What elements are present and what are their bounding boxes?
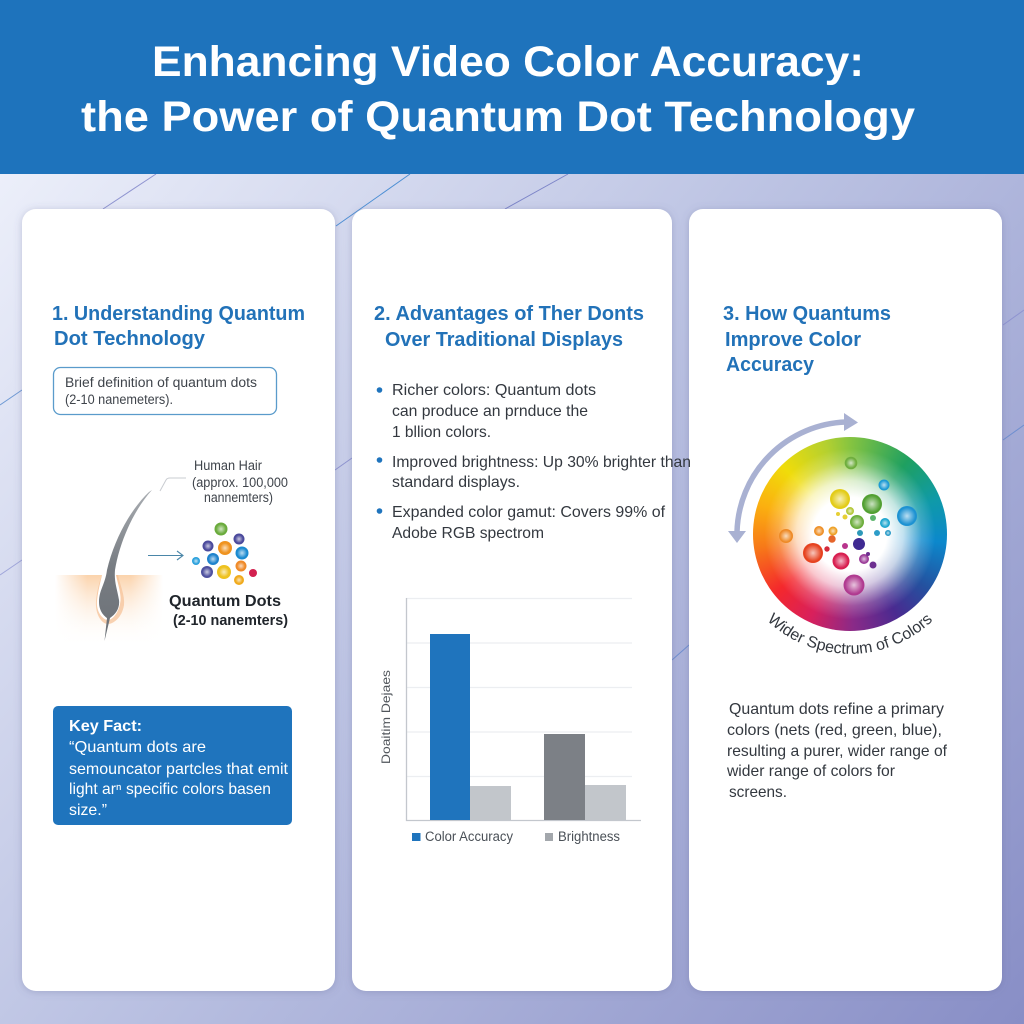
callout: key fact: “Quantum dots are [69,739,206,756]
heading: panel 3: 3. How Quantums [723,303,891,325]
description text [726,701,948,801]
wheel caption: Wider Spectrum of Colors [769,612,932,654]
bullet: richer colors: can produce an prnduce the [392,403,588,420]
title [81,38,915,141]
title: the Power of Quantum Dot Technology [81,93,915,141]
chart legend: Brightness [558,829,620,844]
label: human hair: Human Hair [194,458,262,473]
definition box: (2-10 nanemeters). [65,392,173,407]
definition box [54,368,276,414]
title: Enhancing Video Color Accuracy: [152,38,864,86]
callout: key fact: size.” [69,802,107,819]
bullet: expanded color gamut [377,504,666,542]
quantum dot bubbles [779,457,917,596]
heading: panel 2: Over Traditional Displays [385,329,623,351]
label: quantum dots [169,593,288,629]
chart legend [412,829,620,844]
header banner [0,0,1024,174]
illustration: human hair in skin [55,478,186,647]
bar chart: Doaitim Dejaes [379,670,393,764]
callout: key fact: light arⁿ specific colors basen [69,781,271,798]
heading: panel 1: 1. Understanding Quantum [52,303,305,325]
label: quantum dots: Quantum Dots [169,593,281,610]
heading: panel 1 [52,303,305,350]
arrow: hair to dots [148,551,183,560]
callout: key fact: Key Fact: [69,718,142,735]
color wheel [752,436,948,632]
bar chart [379,598,641,844]
heading: panel 2 [374,303,644,351]
panel: advantages over traditional displays [352,209,691,991]
definition box: Brief definition of quantum dots [65,375,257,390]
bullet: improved brightness [377,454,691,491]
bullet: expanded color gamut: Adobe RGB spectrom [392,525,544,542]
chart legend: Color Accuracy [425,829,513,844]
arrow: curved double arrow [728,413,858,543]
bullet: richer colors [377,382,596,441]
heading: panel 3 [723,303,891,376]
description text: screens. [729,784,787,801]
description text: wider range of colors for [726,763,895,780]
panel: how quantum dots improve color accuracy [686,208,1004,993]
callout: key fact: semouncator partcles that emit [69,761,289,778]
label: human hair: nannemters) [204,490,273,505]
description text: colors (nets (red, green, blue), [727,722,942,739]
callout: key fact [53,706,292,825]
heading: panel 1: Dot Technology [54,328,206,350]
bullet: richer colors: 1 bllion colors. [392,424,491,441]
bullet: richer colors: Richer colors: Quantum dots [392,382,596,399]
bullet: expanded color gamut: Expanded color gamut: Covers 99% of [392,504,666,521]
description text: Quantum dots refine a primary [729,701,944,718]
description text: resulting a purer, wider range of [727,743,948,760]
label: quantum dots: (2-10 nanemters) [173,612,288,629]
bullet: improved brightness: standard displays. [392,474,520,491]
icon: quantum dots cluster [192,522,257,585]
heading: panel 3: Improve Color [725,329,861,351]
heading: panel 3: Accuracy [726,354,815,376]
heading: panel 2: 2. Advantages of Ther Donts [374,303,644,325]
panel: understanding quantum dot technology [22,209,335,991]
label: human hair: (approx. 100,000 [192,475,288,490]
bullet: improved brightness: Improved brightness: Up 30% brighter than [392,454,691,471]
label: human hair [192,458,288,505]
